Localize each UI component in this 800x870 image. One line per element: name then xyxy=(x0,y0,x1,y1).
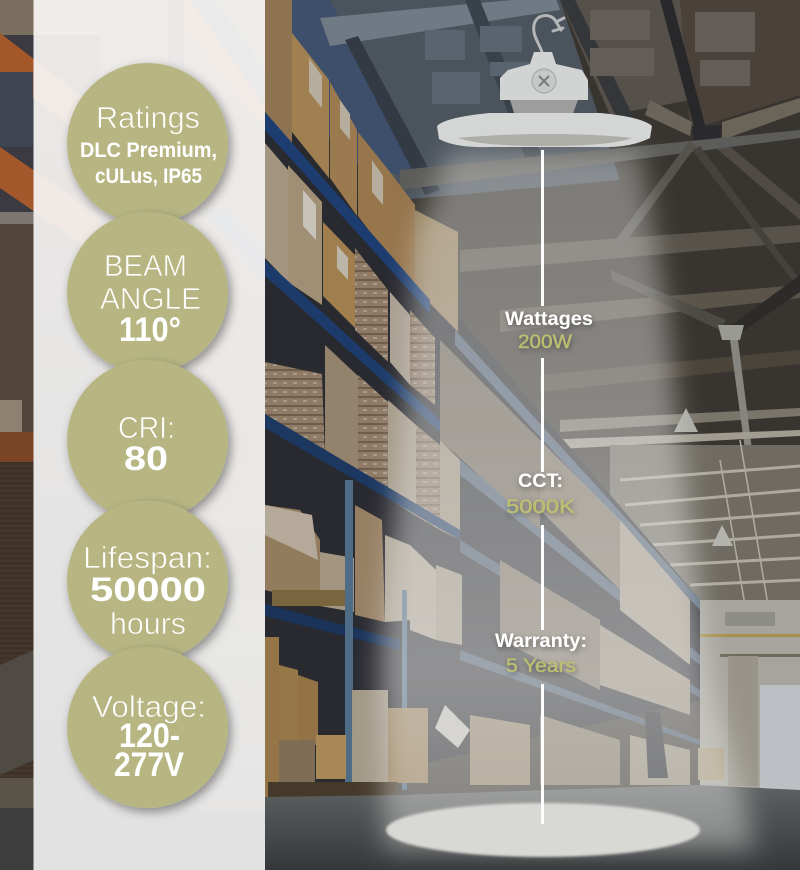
badge: ratings xyxy=(67,63,228,224)
far racking under the light xyxy=(455,330,700,610)
badge: CRI: CRI: xyxy=(118,410,175,445)
fixture neck xyxy=(510,100,578,116)
side panel xyxy=(34,0,265,870)
badge: voltage xyxy=(67,647,228,808)
floor xyxy=(265,785,800,870)
badge: CRI: 80 xyxy=(124,440,168,478)
blue beam 4 xyxy=(265,604,400,650)
badge: lifespan: 50000 xyxy=(90,571,206,609)
badge: CRI xyxy=(67,360,228,521)
spec: wattages: 200W xyxy=(518,332,572,353)
light beam haze xyxy=(380,150,755,850)
upright xyxy=(345,480,353,785)
fourth row boxes xyxy=(265,505,320,604)
fifth row boxes xyxy=(265,637,279,797)
badge: beam angle: ANGLE xyxy=(100,281,201,316)
ceiling xyxy=(265,0,800,470)
fixture housing xyxy=(500,52,588,100)
icon: screw slot xyxy=(539,76,549,86)
spec: warranty: 5 Years xyxy=(506,656,576,677)
badge: voltage: 277V xyxy=(114,746,184,784)
second row boxes xyxy=(265,143,288,282)
fixture LED band xyxy=(458,134,632,146)
badge: beam angle xyxy=(67,212,228,373)
third row boxes xyxy=(265,362,325,460)
badge: lifespan xyxy=(67,500,228,662)
spec: CCT: CCT: xyxy=(518,471,563,492)
blue beam 1 xyxy=(265,112,430,314)
spec: warranty xyxy=(495,631,587,677)
spec: wattages xyxy=(505,309,593,353)
badge: ratings: cULus, IP65 xyxy=(95,165,202,188)
badge: ratings: Ratings xyxy=(96,100,200,135)
top row boxes xyxy=(265,0,292,145)
badge: voltage: Voltage: xyxy=(92,689,206,724)
spec: wattages: Wattages xyxy=(505,309,593,330)
blue beam 2 xyxy=(265,260,440,432)
spec: CCT: 5000K xyxy=(506,497,575,518)
badge: voltage: 120- xyxy=(119,717,180,755)
spec: warranty: Warranty: xyxy=(495,631,587,652)
left strip racking xyxy=(0,0,265,870)
far ceiling and end wall xyxy=(610,440,800,790)
badge: lifespan: hours xyxy=(110,606,186,641)
icon: hook xyxy=(534,16,564,55)
vertical line segments xyxy=(541,150,544,824)
storage racking with boxes xyxy=(265,0,700,800)
spec: CCT xyxy=(506,471,575,518)
badge: ratings: DLC Premium, xyxy=(80,139,217,162)
badge: lifespan: Lifespan: xyxy=(83,540,212,575)
blue beam 3 xyxy=(265,414,460,540)
badge: beam angle: 110° xyxy=(119,311,181,349)
light fixture xyxy=(437,16,652,147)
fixture junction cap xyxy=(532,69,556,93)
floor light spot xyxy=(386,803,700,857)
fixture disc xyxy=(437,113,652,147)
badge: beam angle: BEAM xyxy=(104,248,187,283)
